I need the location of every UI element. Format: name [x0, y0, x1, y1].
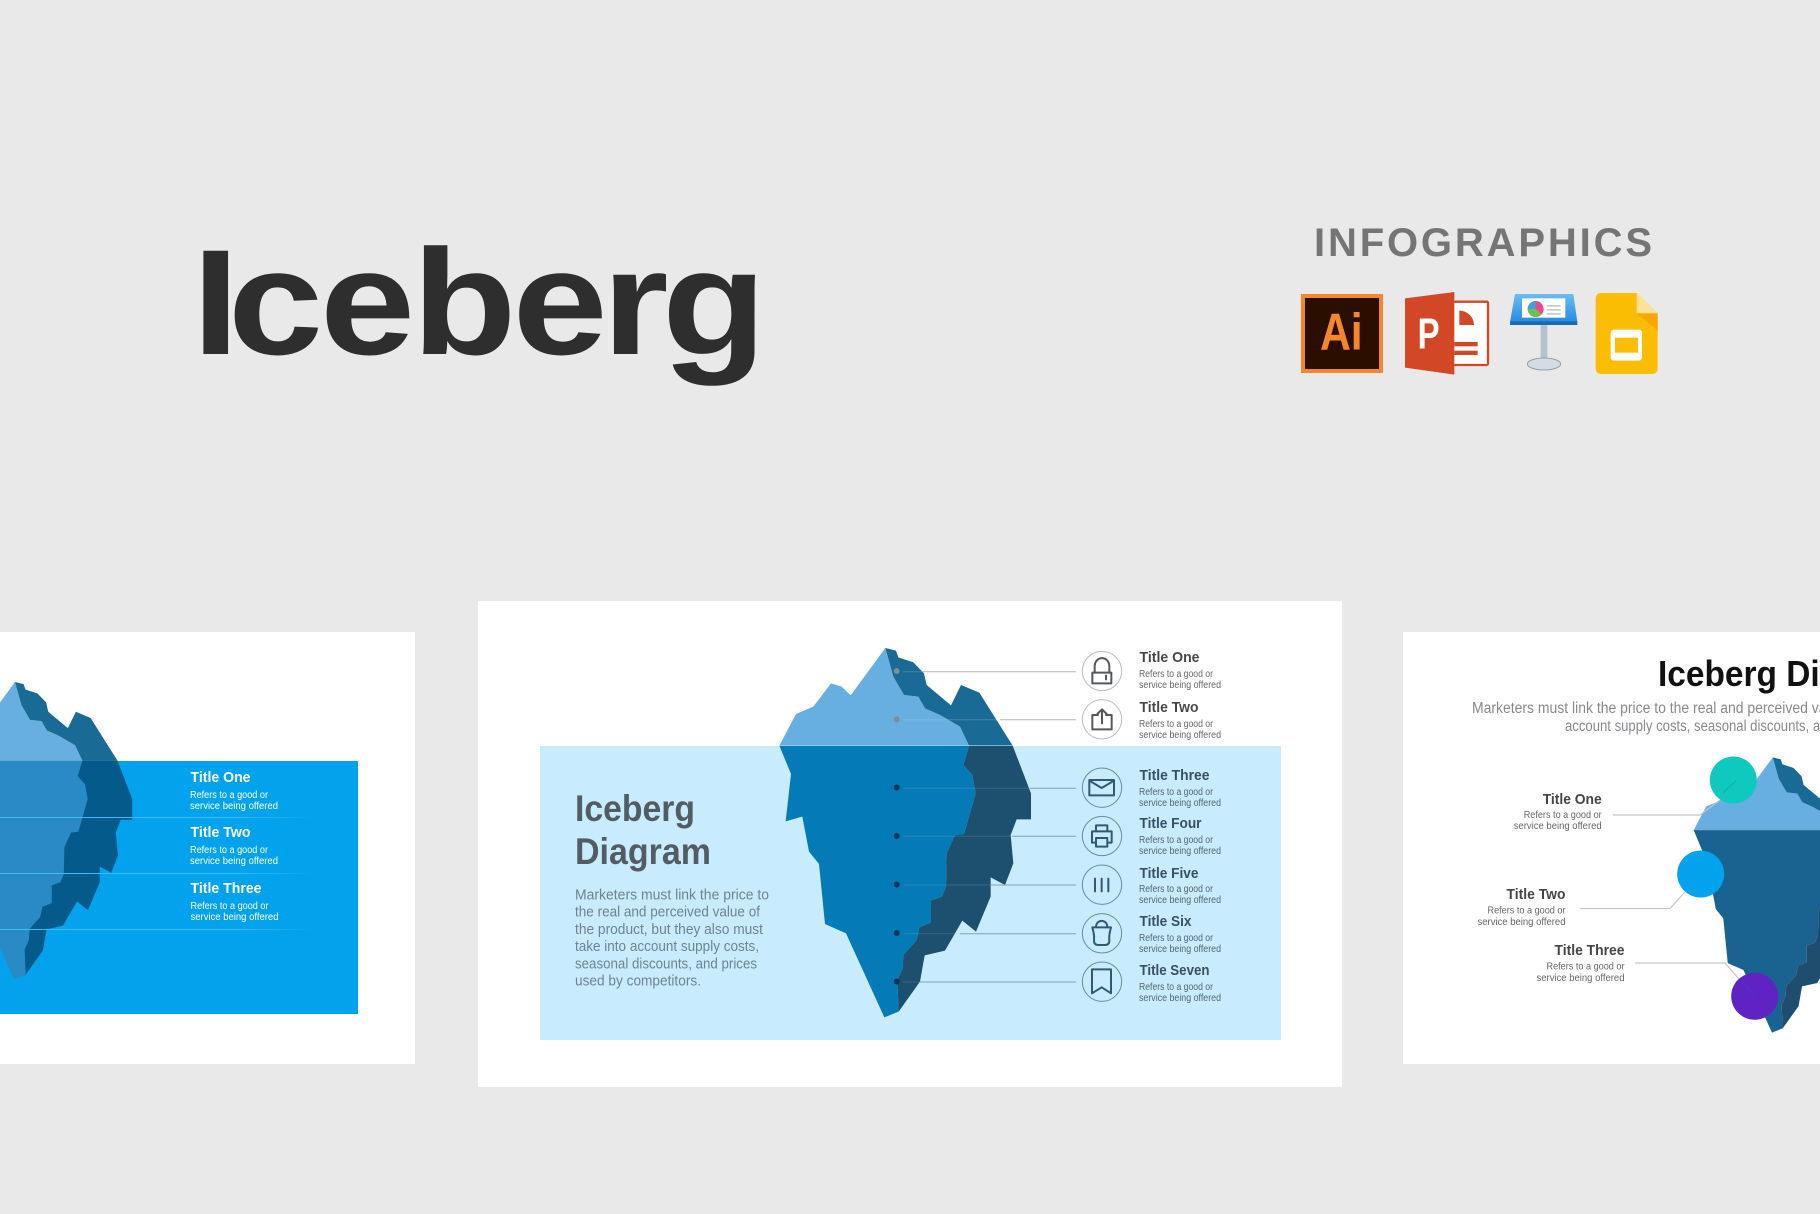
left labels: service being offered	[190, 912, 278, 923]
center labels bottom: Title Three	[1140, 767, 1210, 784]
center labels bottom: Title Seven	[1140, 962, 1210, 979]
left labels: Title One	[190, 769, 250, 786]
right labels: Refers to a good or	[1546, 962, 1625, 972]
icon: share	[1082, 700, 1122, 739]
center labels top: service being offered	[1139, 680, 1221, 691]
center labels bottom: service being offered	[1139, 846, 1221, 857]
center labels bottom	[1139, 767, 1221, 1004]
icon: lock	[1082, 651, 1122, 691]
center labels bottom: Refers to a good or	[1139, 835, 1214, 846]
iceberg: right slide	[1694, 757, 1820, 1033]
right labels	[1478, 791, 1625, 984]
icon: envelope	[1082, 768, 1122, 807]
center labels bottom: service being offered	[1139, 944, 1221, 955]
marker: purple circle	[1731, 973, 1778, 1020]
left labels: service being offered	[190, 801, 278, 812]
right labels: service being offered	[1514, 821, 1602, 832]
icon: powerpoint: P	[1418, 311, 1440, 359]
heading: iceberg diagram	[575, 788, 711, 872]
paragraph: used by competitors.	[575, 972, 701, 990]
paragraph: seasonal discounts, and prices	[575, 955, 757, 972]
iceberg: left slide	[0, 682, 132, 979]
paragraph	[1472, 700, 1820, 735]
left labels: Title Three	[190, 880, 262, 897]
right labels: Title One	[1543, 791, 1602, 808]
marker dots	[894, 668, 900, 984]
left labels: Refers to a good or	[190, 845, 269, 856]
icon: illustrator	[1303, 296, 1381, 371]
circle inner leader ticks	[1723, 781, 1755, 997]
center labels bottom: Refers to a good or	[1139, 982, 1214, 993]
panel: left slide	[0, 632, 415, 1064]
center labels bottom: Refers to a good or	[1139, 933, 1214, 944]
icon: printer	[1082, 816, 1122, 856]
right labels: Refers to a good or	[1524, 810, 1602, 821]
center labels bottom: service being offered	[1139, 993, 1221, 1004]
heading: iceberg diagram: Diagram	[575, 831, 711, 872]
right labels: service being offered	[1478, 917, 1566, 928]
left labels: service being offered	[190, 856, 278, 867]
icon: powerpoint	[1405, 292, 1488, 375]
subtitle: infographics: INFOGRAPHICS	[1314, 221, 1652, 265]
main title: Iceberg	[192, 219, 766, 387]
paragraph: the real and perceived value of	[575, 904, 761, 921]
blue panel	[0, 761, 358, 1014]
center labels bottom: Title Six	[1140, 913, 1192, 930]
divider lines	[0, 817, 316, 930]
panel: center slide	[478, 601, 1342, 1087]
left labels: Refers to a good or	[190, 790, 269, 801]
leader lines	[1580, 800, 1745, 986]
icon: bag	[1082, 914, 1122, 953]
icon: sliders	[1082, 865, 1122, 904]
software icons	[1303, 292, 1658, 375]
center labels bottom: Refers to a good or	[1139, 787, 1214, 798]
right labels: service being offered	[1536, 973, 1624, 984]
center labels top: service being offered	[1139, 730, 1221, 741]
light blue water panel	[540, 746, 1281, 1040]
icon: bookmark	[1082, 962, 1122, 1001]
iceberg: center slide	[779, 648, 1031, 1017]
marker: teal circle	[1710, 756, 1757, 804]
center labels bottom: Title Five	[1140, 865, 1198, 882]
center labels bottom: service being offered	[1139, 895, 1221, 906]
right labels: Title Three	[1554, 942, 1624, 959]
leader lines	[903, 672, 1076, 982]
paragraph	[575, 886, 769, 990]
center labels top: Title Two	[1140, 699, 1198, 716]
center labels bottom: Title Four	[1140, 815, 1202, 832]
right labels: Title Two	[1506, 886, 1566, 903]
center labels bottom: Refers to a good or	[1139, 884, 1214, 895]
paragraph: Marketers must link the price to	[575, 886, 769, 904]
center labels bottom: service being offered	[1139, 798, 1221, 809]
center labels top: Title One	[1140, 649, 1200, 666]
right labels: Refers to a good or	[1488, 906, 1566, 916]
left labels	[190, 769, 278, 923]
center labels top	[1139, 649, 1221, 741]
center labels top: Refers to a good or	[1139, 669, 1214, 680]
marker: blue circle	[1677, 850, 1724, 898]
icon: keynote	[1510, 294, 1577, 370]
paragraph: take into account supply costs,	[575, 938, 759, 955]
heading: iceberg diagram: Iceberg	[575, 788, 695, 829]
center labels top: Refers to a good or	[1139, 719, 1214, 730]
panel: right slide	[1403, 632, 1820, 1064]
icon: google slides	[1596, 293, 1658, 374]
left labels: Refers to a good or	[190, 901, 269, 912]
paragraph: the product, but they also must	[575, 921, 764, 938]
icon circles	[1082, 651, 1122, 1001]
icon: illustrator: Ai	[1320, 302, 1363, 360]
left labels: Title Two	[190, 824, 250, 841]
